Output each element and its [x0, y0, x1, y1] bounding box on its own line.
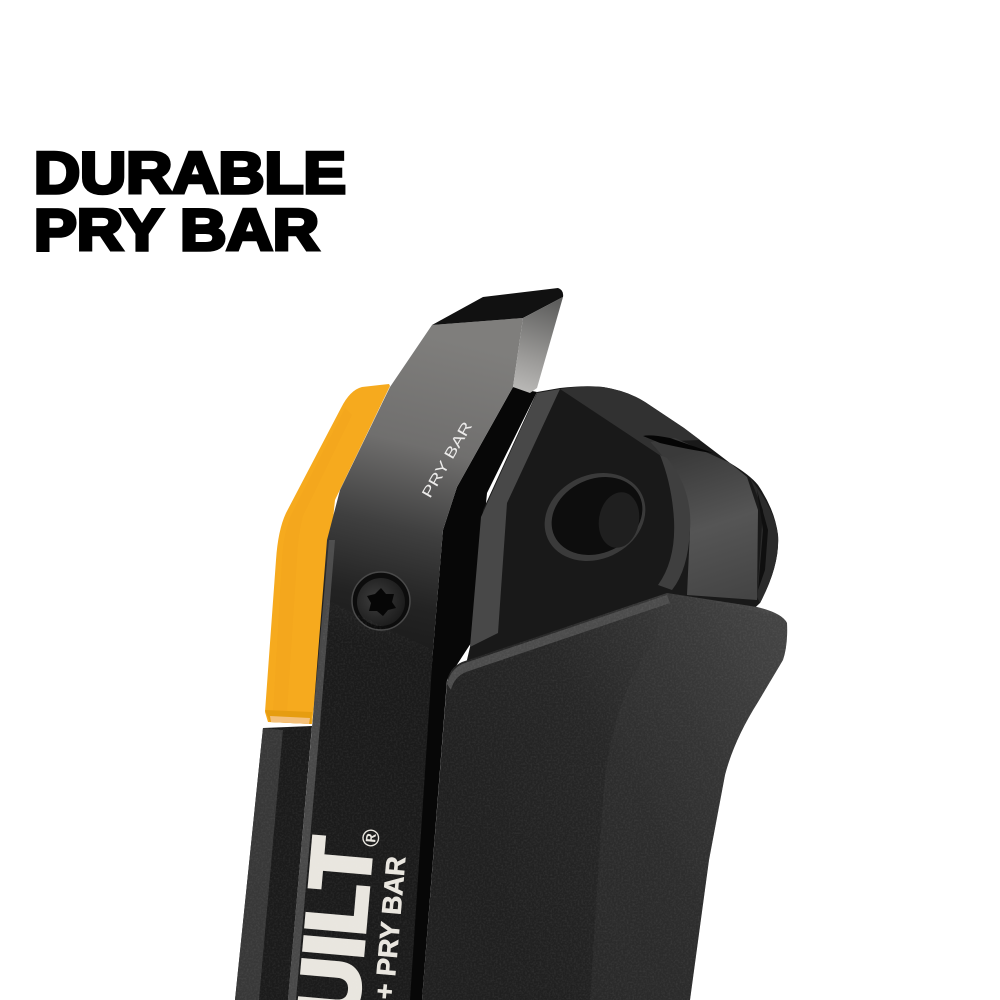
product line text: + PRY BAR: [369, 855, 411, 1000]
tool illustration: [230, 288, 800, 1000]
dark outer cap: [750, 478, 778, 603]
torx screw: [352, 572, 410, 630]
black channel behind bar: [405, 387, 537, 1000]
surface grain: [230, 590, 790, 1000]
title: DURABLE: [34, 141, 346, 206]
dark slot: [643, 435, 713, 453]
title: PRY BAR: [34, 198, 319, 263]
pivot head: [460, 386, 778, 690]
yellow slider button: [265, 384, 390, 724]
blade bevel facet: [513, 297, 563, 393]
engraved label: PRY BAR: [419, 419, 476, 501]
lower left black handle: [235, 726, 312, 1000]
oval recess: [530, 457, 660, 577]
registered mark: ®: [357, 828, 386, 848]
title: [34, 141, 346, 263]
round collar: [658, 455, 690, 590]
grip handle: [422, 593, 800, 1000]
pry bar blade: [281, 288, 563, 1000]
light strip: [470, 389, 560, 647]
right grey barrel: [650, 438, 758, 600]
blade tip top face: [432, 288, 563, 325]
top lit rim: [560, 386, 700, 460]
